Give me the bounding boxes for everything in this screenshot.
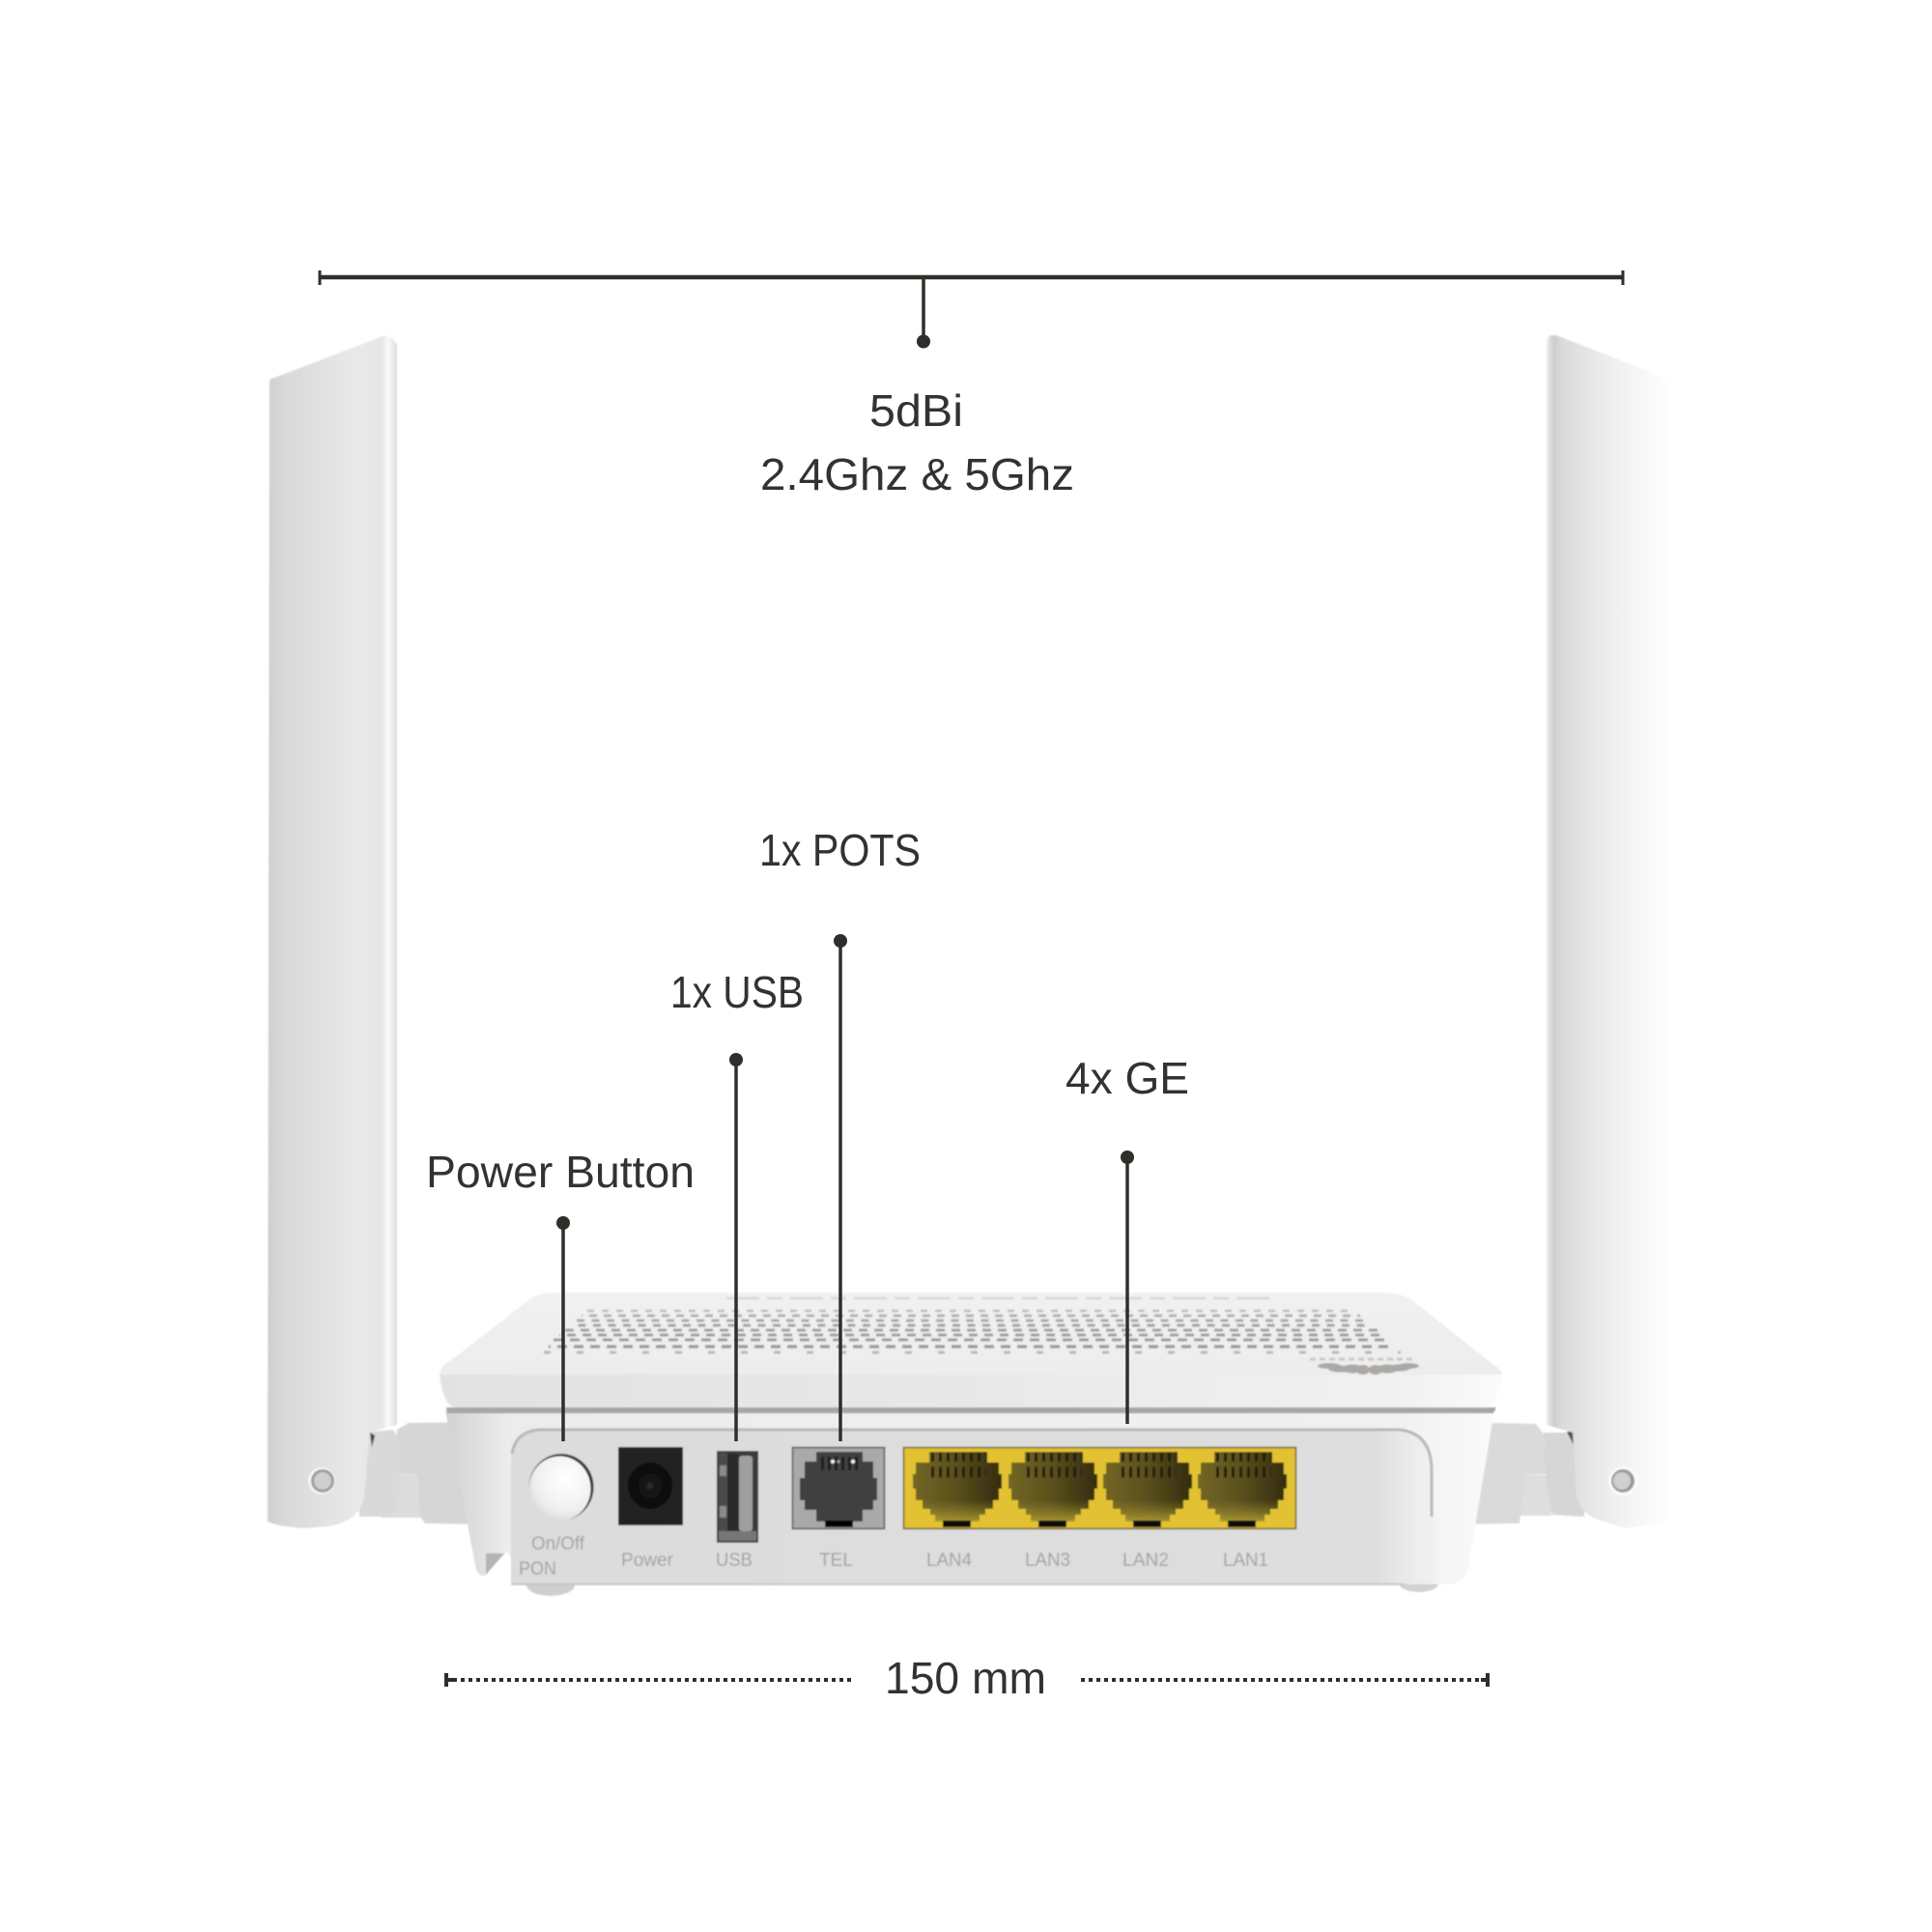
LAN3 socket — [1009, 1452, 1097, 1527]
antenna spec text — [760, 385, 1074, 499]
power button — [529, 1454, 593, 1520]
icon: right antenna screw — [1608, 1466, 1637, 1495]
lid seam — [446, 1407, 1496, 1413]
callout: POTS — [759, 825, 921, 1441]
callout: POTS: 1x POTS — [759, 825, 921, 875]
ventilation holes — [544, 1311, 1401, 1352]
port labels: On/Off — [531, 1534, 585, 1554]
port labels — [519, 1534, 1268, 1579]
rear port recess — [511, 1430, 1439, 1584]
callout: USB — [670, 967, 804, 1441]
LAN4 socket — [913, 1452, 1002, 1527]
router body — [445, 1410, 1494, 1584]
port labels: LAN1 — [1223, 1550, 1268, 1571]
LAN port block — [904, 1447, 1296, 1528]
lid front — [440, 1375, 1502, 1407]
port labels: USB — [716, 1550, 753, 1571]
port labels: PON — [519, 1559, 556, 1579]
antenna span bracket — [320, 270, 1623, 348]
callout: GE — [1065, 1053, 1189, 1424]
notch — [486, 1553, 504, 1575]
hinge: right antenna — [1449, 1422, 1584, 1524]
right antenna — [1547, 335, 1672, 1528]
brand logo — [1310, 1359, 1419, 1375]
port labels: LAN4 — [926, 1550, 972, 1571]
LAN2 socket — [1103, 1452, 1192, 1527]
icon: left antenna screw — [308, 1467, 335, 1494]
callout: GE: 4x GE — [1065, 1053, 1189, 1103]
router — [440, 1293, 1502, 1596]
router and antennas — [268, 335, 1672, 1596]
power jack — [618, 1447, 683, 1525]
port labels: LAN2 — [1122, 1550, 1169, 1571]
TEL port — [792, 1447, 885, 1528]
router feet — [526, 1575, 1438, 1596]
left antenna — [268, 335, 397, 1528]
callout: power button: Power Button — [426, 1147, 695, 1197]
callout: USB: 1x USB — [670, 967, 804, 1017]
width dimension: 150 mm — [885, 1653, 1046, 1703]
callout: power button — [426, 1147, 695, 1441]
USB port — [717, 1451, 758, 1543]
port labels: LAN3 — [1025, 1550, 1070, 1571]
antenna spec text: 2.4Ghz & 5Ghz — [760, 449, 1074, 499]
lid top — [440, 1293, 1502, 1375]
LAN1 socket — [1198, 1452, 1287, 1527]
hinge: left antenna — [359, 1422, 483, 1524]
antenna spec text: 5dBi — [869, 385, 963, 436]
lid top print — [726, 1296, 1275, 1300]
port labels: Power — [621, 1550, 674, 1571]
port labels: TEL — [819, 1550, 853, 1571]
